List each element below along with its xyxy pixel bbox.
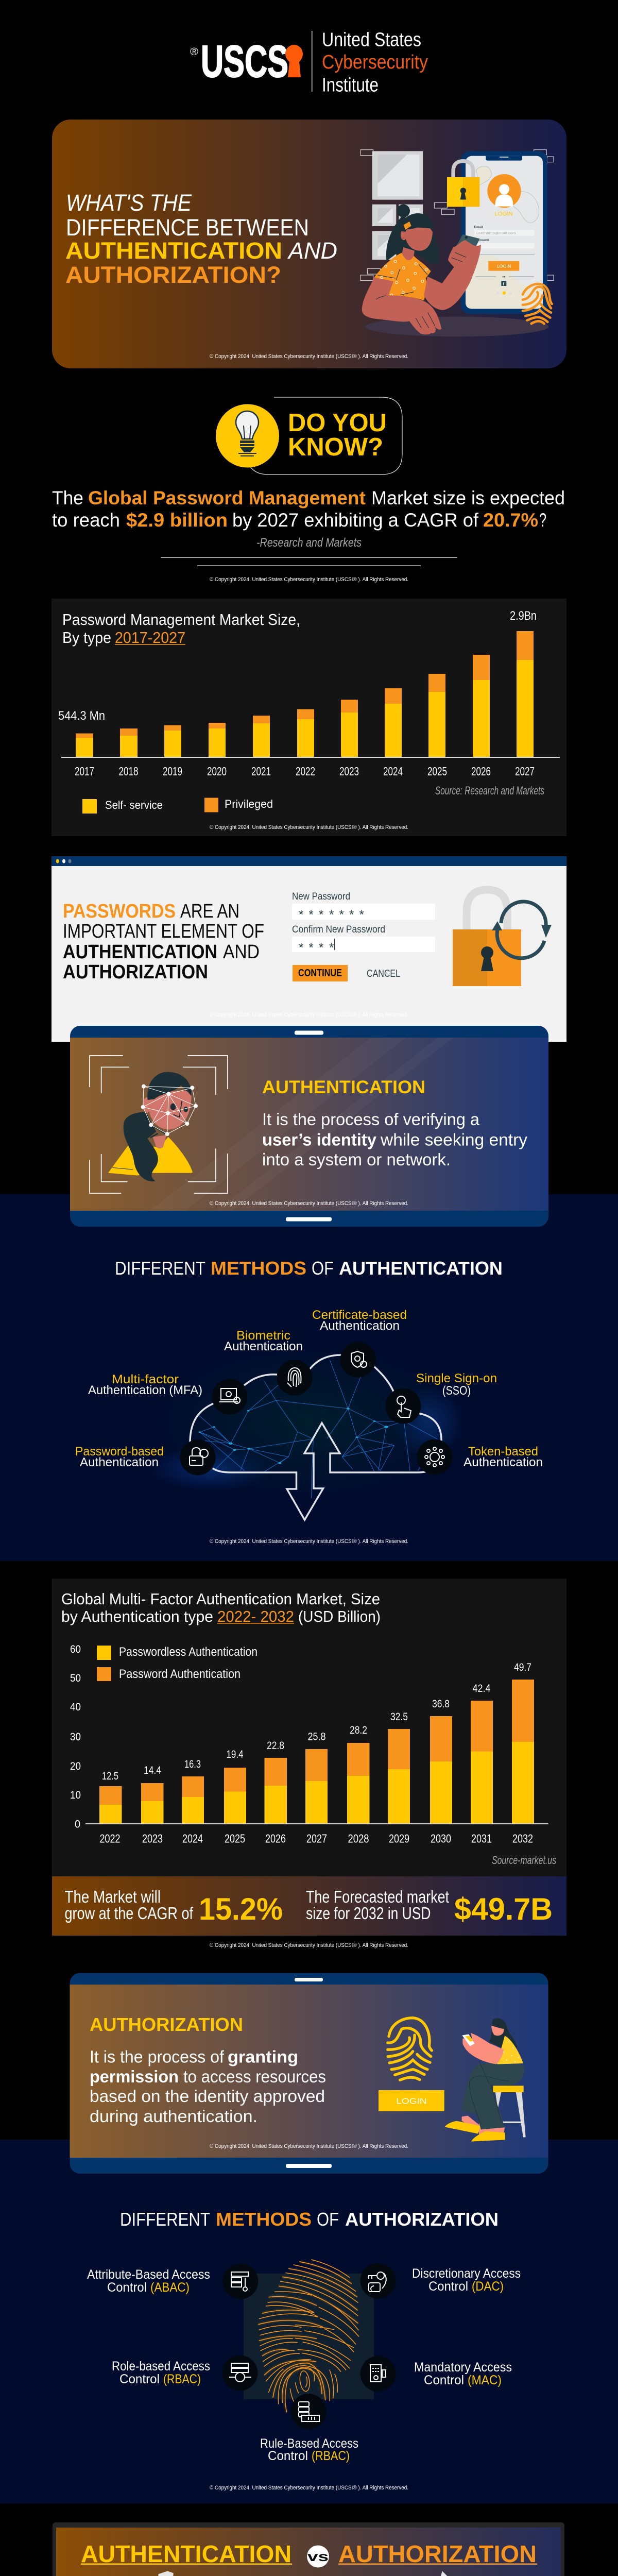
hero illustration: woman logging in on phone: Email [474, 226, 483, 229]
icon: multi-factor [212, 1379, 247, 1415]
logo: ® [190, 46, 198, 58]
label: token-based [464, 1445, 543, 1469]
y axis: 0 [75, 1819, 80, 1830]
y axis: 20 [70, 1760, 81, 1772]
logo: Cybersecurity [322, 52, 428, 73]
chart title: By type [62, 629, 111, 647]
source: Source: Research and Markets [435, 784, 544, 797]
definition text: during authentication. [90, 2107, 258, 2126]
hero illustration: woman logging in on phone [360, 150, 554, 336]
chart title [61, 1590, 381, 1625]
label: role-based RBAC: (RBAC) [163, 2372, 201, 2386]
heading: AUTHORIZATION [63, 961, 208, 983]
label: password-based [75, 1445, 164, 1469]
y axis: 40 [70, 1701, 81, 1713]
label: password-based: Authentication [80, 1455, 159, 1469]
heading: methods of authorization: METHODS [216, 2209, 312, 2230]
label: DAC: Control [428, 2279, 468, 2294]
hero illustration: woman logging in on phone: username@mail.com [476, 232, 516, 235]
year labels: 2027 [306, 1832, 327, 1845]
label: password-based: Password-based [75, 1445, 164, 1459]
bar chart: 2022 [296, 765, 315, 778]
chart title: Password Management Market Size, [62, 611, 300, 629]
label: biometric [224, 1329, 303, 1353]
bar chart: 2024 [383, 765, 403, 778]
icon: ABAC [222, 2264, 259, 2299]
definition text: AUTHENTICATION [262, 1077, 425, 1097]
bar chart: 2026 [471, 765, 491, 778]
source: Source-market.us [492, 1854, 556, 1867]
stat banner: $49.7B [454, 1892, 553, 1926]
label: multi-factor: Authentication (MFA) [88, 1383, 202, 1397]
text block: market statement: $2.9 billion [126, 510, 228, 531]
copyright: © Copyright 2024. United States Cybersecurity Institute (USCSI® ). All Rights Reserved. [210, 353, 408, 360]
copyright: © Copyright 2024. United States Cybersecurity Institute (USCSI® ). All Rights Reserved. [210, 824, 408, 831]
logo [190, 29, 428, 96]
password form: CANCEL [367, 968, 400, 979]
heading: AUTHENTICATION [63, 941, 217, 963]
bar chart: 2.9Bn [510, 609, 537, 623]
year labels: 2030 [431, 1832, 451, 1845]
year labels [100, 1832, 533, 1845]
password form: New Password [292, 891, 350, 902]
bar chart: 544.3 Mn [58, 709, 105, 723]
title: AUTHORIZATION? [65, 262, 281, 288]
icon: certificate [340, 1342, 376, 1378]
label: DAC: Discretionary Access [412, 2266, 521, 2281]
chart title: 2017-2027 [115, 629, 185, 647]
text block: market statement: to reach [52, 510, 120, 531]
bar values: 25.8 [308, 1731, 325, 1742]
hero illustration: woman logging in on phone: Password [475, 239, 489, 242]
icon: password-based [180, 1439, 215, 1476]
label: multi-factor [88, 1372, 202, 1397]
y axis: 60 [70, 1643, 81, 1655]
vs badge [307, 2545, 329, 2568]
legend: Privileged [225, 798, 273, 810]
label: role-based RBAC: Control [119, 2372, 160, 2386]
definition text: user’s identity [262, 1130, 377, 1149]
label: MAC: Mandatory Access [414, 2360, 512, 2375]
bar chart: 2021 [251, 765, 271, 778]
bar values: 12.5 [102, 1770, 118, 1782]
year labels: 2032 [512, 1832, 533, 1845]
copyright: © Copyright 2024. United States Cybersecurity Institute (USCSI® ). All Rights Reserved. [210, 1942, 408, 1948]
year labels: 2026 [265, 1832, 286, 1845]
bar chart: 2023 [339, 765, 359, 778]
label: MAC [414, 2360, 512, 2387]
stat banner: 15.2% [199, 1892, 283, 1926]
y axis: 30 [70, 1731, 81, 1743]
text block: market statement: Global Password Management [88, 487, 366, 509]
label: ABAC: Control [107, 2280, 147, 2295]
panel: passwords browser window [52, 856, 566, 1042]
definition text: into a system or network. [262, 1150, 451, 1169]
heading: AND [223, 941, 260, 963]
legend [97, 1645, 258, 1681]
label: token-based: Token-based [468, 1445, 538, 1459]
panel: authentication vs authorization header: AUTHENTICATION [81, 2540, 291, 2567]
bar values: 19.4 [227, 1749, 244, 1760]
definition text: It is the process of [90, 2047, 225, 2066]
label: biometric: Biometric [236, 1329, 290, 1343]
panel: authentication vs authorization header: AUTHORIZATION [338, 2540, 537, 2567]
chart title: 2022- 2032 [217, 1607, 294, 1625]
text block: market statement: -Research and Markets [256, 536, 362, 550]
password form: Confirm New Password [292, 924, 385, 935]
label: role-based RBAC [112, 2359, 210, 2386]
icon: rule-based [290, 2394, 327, 2429]
panel: hero banner [52, 120, 566, 368]
password form: ******* [299, 908, 364, 922]
text block: market statement: The [52, 487, 83, 509]
panel: authorization definition tablet [70, 1973, 548, 2174]
definition text: permission [90, 2067, 179, 2086]
copyright: © Copyright 2024. United States Cybersecurity Institute (USCSI® ). All Rights Reserved. [210, 2143, 408, 2149]
label: rule-based RBAC: (RBAC) [312, 2449, 350, 2463]
label: single sign-on: (SSO) [442, 1384, 471, 1398]
chart title: (USD Billion) [298, 1607, 381, 1625]
bar chart: 2018 [118, 765, 138, 778]
stat banner: The Forecasted market [306, 1887, 449, 1906]
label: role-based RBAC: Role-based Access [112, 2359, 210, 2374]
label: ABAC: Attribute-Based Access [87, 2267, 210, 2282]
copyright: © Copyright 2024. United States Cybersecurity Institute (USCSI® ). All Rights Reserved. [210, 1200, 408, 1207]
label: DAC [412, 2266, 521, 2294]
text block: market statement: 20.7% [483, 510, 538, 531]
bar values: 22.8 [267, 1740, 284, 1752]
cloud outline with double arrow [190, 1355, 441, 1520]
hero illustration: woman logging in on phone: or [502, 276, 505, 279]
heading: methods of authentication: METHODS [211, 1258, 306, 1279]
label: multi-factor: Multi-factor [112, 1372, 179, 1386]
illustration: face recognition [90, 1056, 228, 1193]
chart title: Global Multi- Factor Authentication Market, Size [61, 1590, 380, 1608]
year labels: 2024 [182, 1832, 203, 1845]
chart title [62, 611, 300, 647]
title [65, 190, 337, 288]
bar values: 16.3 [184, 1758, 201, 1770]
bar values: 28.2 [350, 1724, 367, 1736]
bar chart: 2027 [515, 765, 535, 778]
label: token-based: Authentication [464, 1455, 543, 1469]
icon: MAC [360, 2356, 396, 2392]
network lines [199, 1360, 438, 1498]
label: biometric: Authentication [224, 1340, 303, 1353]
bar values: 42.4 [473, 1683, 491, 1694]
bar chart [85, 1662, 548, 1845]
heading: methods of authorization: DIFFERENT [120, 2209, 210, 2230]
year labels: 2028 [348, 1832, 369, 1845]
title: WHAT'S THE [66, 190, 192, 216]
bar values [102, 1662, 531, 1782]
panel: multi-factor authentication market chart [52, 1579, 566, 1876]
icon: padlock with refresh arrows [453, 890, 552, 986]
label: single sign-on [416, 1371, 497, 1398]
legend [82, 798, 273, 814]
definition text: AUTHORIZATION [90, 2014, 243, 2035]
heading: methods of authorization [120, 2209, 499, 2230]
heading: methods of authentication: AUTHENTICATION [339, 1258, 503, 1279]
y axis: 50 [70, 1672, 81, 1684]
bar chart: 2017 [75, 765, 94, 778]
hero illustration: woman logging in on phone: LOGIN [495, 211, 513, 217]
label: DAC: (DAC) [472, 2279, 504, 2294]
heading: PASSWORDS [63, 901, 176, 922]
text block: market statement [52, 487, 565, 550]
heading: ARE AN [180, 901, 239, 922]
password form: CONTINUE [298, 968, 342, 979]
bar chart [58, 609, 560, 778]
icon: large fingerprint [259, 2260, 359, 2412]
logo: Institute [322, 74, 379, 96]
chart title: by Authentication type [61, 1607, 213, 1625]
logo: USCS [201, 37, 288, 87]
heading: IMPORTANT ELEMENT OF [63, 921, 264, 942]
diagram: authentication cloud [75, 1308, 543, 1520]
label: MAC: Control [424, 2373, 464, 2387]
year labels: 2023 [142, 1832, 163, 1845]
bar chart: 2020 [207, 765, 227, 778]
definition text [90, 2014, 326, 2126]
title: DIFFERENCE BETWEEN [66, 214, 309, 241]
definition text: to access resources [183, 2067, 326, 2086]
heading: methods of authorization: OF [317, 2209, 339, 2230]
heading [63, 901, 264, 983]
bar chart: 2019 [163, 765, 182, 778]
year labels: 2031 [471, 1832, 492, 1845]
bar values: 49.7 [514, 1662, 531, 1673]
text block: market statement: by 2027 exhibiting a CAGR of [232, 510, 479, 531]
bar values: 36.8 [432, 1698, 450, 1710]
copyright: © Copyright 2024. United States Cybersecurity Institute (USCSI® ). All Rights Reserved. [210, 2485, 408, 2491]
hero illustration: woman logging in on phone: f [503, 281, 504, 286]
definition text: It is the process of verifying a [262, 1110, 480, 1129]
icon: biometric [277, 1360, 312, 1395]
bar values: 32.5 [390, 1711, 408, 1723]
y axis: 10 [70, 1789, 81, 1801]
text block: market statement: Market size is expected [371, 487, 565, 509]
legend: Self- service [105, 799, 163, 811]
badge: do you know [216, 397, 402, 474]
panel: authentication definition tablet [70, 1026, 548, 1227]
illustration: fingerprint, login and seated woman [379, 2018, 526, 2142]
legend: Password Authentication [119, 1667, 241, 1681]
diagram: authorization fingerprint [87, 2260, 521, 2463]
logo: United States [322, 29, 421, 50]
definition text: granting [228, 2047, 298, 2066]
label: single sign-on: Single Sign-on [416, 1371, 497, 1385]
year labels: 2029 [389, 1832, 409, 1845]
title: AUTHENTICATION [65, 238, 282, 264]
year labels: 2025 [225, 1832, 245, 1845]
label: certificate-based: Authentication [320, 1319, 400, 1333]
illustration: fingerprint, login and seated woman: LOGIN [396, 2097, 427, 2106]
legend: Passwordless Authentication [119, 1645, 258, 1659]
badge: do you know: KNOW? [288, 433, 383, 461]
text block: market statement: ? [539, 510, 546, 531]
copyright: © Copyright 2024. United States Cybersecurity Institute (USCSI® ). All Rights Reserved. [210, 577, 408, 583]
year labels: 2022 [100, 1832, 121, 1845]
heading: methods of authentication [115, 1258, 503, 1279]
definition text: while seeking entry [380, 1130, 527, 1149]
copyright: © Copyright 2024. United States Cybersecurity Institute (USCSI® ). All Rights Reserved. [210, 1538, 408, 1545]
icon: single sign-on [385, 1388, 421, 1424]
label: rule-based RBAC: Control [268, 2449, 308, 2463]
bar values: 14.4 [144, 1765, 161, 1776]
password form: **** [299, 941, 334, 955]
badge: do you know: DO YOU [288, 409, 387, 437]
panel: password management market chart [52, 599, 566, 836]
bar chart: 2025 [427, 765, 447, 778]
label: ABAC: (ABAC) [150, 2280, 190, 2295]
icon: left robot hand [141, 2571, 176, 2576]
hero illustration: woman logging in on phone: LOGIN [497, 263, 511, 268]
label: rule-based RBAC: Rule-Based Access [260, 2436, 358, 2451]
label: certificate-based [312, 1308, 407, 1333]
stat banner: size for 2032 in USD [306, 1904, 431, 1923]
icon: right robot hand [439, 2571, 473, 2576]
stat banner: grow at the CAGR of [65, 1904, 194, 1923]
icon: light bulb [216, 404, 279, 468]
title: AND [287, 238, 337, 264]
heading: methods of authentication: DIFFERENT [115, 1258, 205, 1279]
copyright: © Copyright 2024. United States Cybersecurity Institute (USCSI® ). All Rights Reserved. [210, 1012, 408, 1018]
label: rule-based RBAC [260, 2436, 358, 2463]
y axis [70, 1643, 81, 1830]
icon: token-based [417, 1439, 452, 1475]
password form [292, 891, 435, 981]
heading: methods of authentication: OF [312, 1258, 334, 1279]
label: MAC: (MAC) [468, 2373, 502, 2387]
vs badge: vs [307, 2549, 329, 2564]
definition text [262, 1077, 527, 1169]
icon: DAC [360, 2263, 396, 2299]
label: certificate-based: Certificate-based [312, 1308, 407, 1322]
panel: authentication vs authorization header [53, 2522, 564, 2576]
stat banner [52, 1876, 566, 1936]
label: ABAC [87, 2267, 210, 2295]
stat banner: The Market will [65, 1887, 161, 1906]
heading: methods of authorization: AUTHORIZATION [345, 2209, 499, 2230]
definition text: based on the identity approved [90, 2087, 325, 2106]
icon: role-based [222, 2355, 258, 2391]
